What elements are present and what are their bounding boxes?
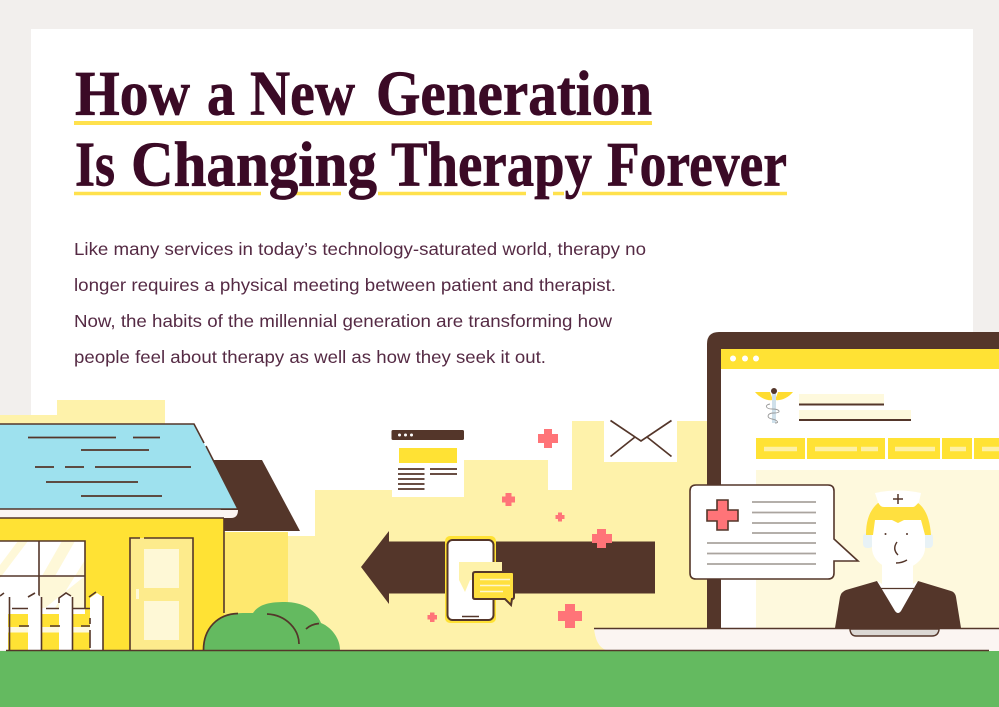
title — [74, 58, 787, 200]
chat bubble — [473, 572, 514, 605]
title: Is — [75, 130, 115, 200]
monitor — [707, 332, 999, 628]
nurse face — [872, 512, 925, 570]
pale yellow skyline background — [0, 400, 708, 650]
desk — [594, 628, 999, 651]
envelope icon — [604, 420, 677, 462]
title: Forever — [607, 130, 787, 200]
window — [0, 541, 85, 614]
caduceus logo — [755, 388, 793, 423]
nurse ears — [863, 533, 933, 548]
title: a — [207, 58, 235, 128]
medical crosses — [428, 429, 612, 628]
browser bar — [721, 349, 999, 369]
web page icon — [392, 430, 464, 497]
nurse — [835, 490, 961, 628]
speech bubble — [690, 485, 858, 579]
title: How — [75, 58, 190, 128]
nurse facial features — [884, 533, 908, 563]
back wing of house — [213, 460, 300, 650]
intro paragraph: longer requires a physical meeting between patient and therapist. — [74, 275, 616, 295]
arrow — [361, 531, 655, 604]
title: New — [250, 58, 355, 128]
navigation bar — [756, 438, 999, 459]
title: Changing — [131, 130, 377, 200]
picket fence — [0, 592, 103, 650]
intro paragraph: Like many services in today’s technology-saturated world, therapy no — [74, 239, 646, 259]
logo heading lines — [799, 394, 911, 420]
intro paragraph — [74, 239, 646, 367]
title: Therapy — [391, 130, 592, 200]
house — [0, 424, 340, 650]
roof — [0, 424, 238, 518]
nurse hair — [866, 503, 931, 535]
smartphone with chat bubble — [445, 536, 514, 623]
nurse body — [835, 581, 961, 628]
house wall — [0, 518, 224, 650]
bush — [203, 602, 340, 650]
content panel — [756, 470, 999, 628]
title: Generation — [376, 58, 652, 128]
intro paragraph: Now, the habits of the millennial generation are transforming how — [74, 311, 612, 331]
intro paragraph: people feel about therapy as well as how they seek it out. — [74, 347, 546, 367]
door — [130, 538, 193, 650]
nurse cap — [875, 490, 921, 507]
ground — [0, 650, 999, 707]
nurse neck and collar — [877, 560, 918, 613]
